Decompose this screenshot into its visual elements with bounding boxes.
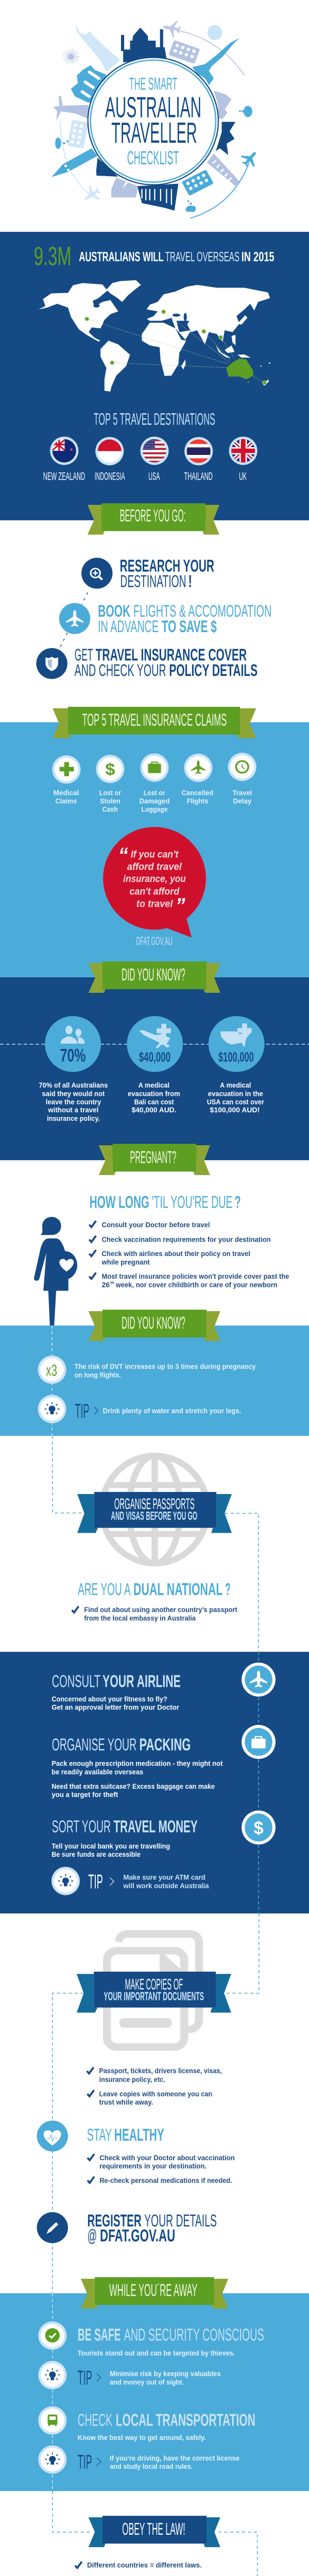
panel: top 5 travel insurance claims: DFAT.GOV.AU — [136, 935, 173, 947]
text: sort your travel money: Tell your local bank you are travelling — [52, 1842, 170, 1850]
checklist: healthy: Check with your Doctor about vaccination — [99, 2154, 235, 2162]
claim: lost cash — [96, 755, 124, 814]
checklist: healthy: requirements in your destination. — [99, 2162, 207, 2170]
text: USA detail: evacuation in the — [208, 1090, 263, 1097]
ribbon: organise passports: ORGANISE PASSPORTS — [114, 1496, 195, 1513]
checklist: pregnancy: Consult your Doctor before travel — [101, 1221, 210, 1229]
claim: cancelled flights: Flights — [187, 797, 209, 805]
text: check local transportation: CHECK — [78, 2411, 112, 2430]
text: register your details: DFAT.GOV.AU — [100, 2226, 175, 2245]
icon: tip bulb — [38, 1395, 66, 1423]
text: register your details: @ — [88, 2226, 97, 2245]
checklist: pregnancy: week, nor cover childbirth or care of your newborn — [115, 1281, 278, 1289]
text: USA detail: A medical — [220, 1081, 251, 1089]
claim: cancelled flights — [181, 754, 213, 805]
text: organise your packing: be readily available overseas — [52, 1768, 143, 1776]
text: research your destination: ! — [188, 572, 192, 591]
claim: travel delay — [228, 753, 256, 805]
ribbon: top 5 claims — [53, 707, 256, 738]
checklist: pregnancy: Check vaccination requirements for your destination — [101, 1235, 271, 1243]
text: stay healthy: HEALTHY — [114, 2126, 164, 2145]
ribbon: while you're away: WHILE YOU´RE AWAY — [109, 2281, 197, 2300]
claim: lost cash: Stolen — [100, 797, 121, 805]
text: consult your airline — [52, 1672, 181, 1711]
ribbon: did you know — [89, 961, 220, 993]
ribbon: did you know: DID YOU KNOW? — [122, 965, 185, 985]
title — [105, 75, 201, 168]
ribbon: pregnant — [99, 1144, 210, 1175]
icon: bus — [38, 2406, 66, 2435]
ribbon: pregnant: PREGNANT? — [130, 1148, 176, 1167]
headline: 9.3M Australians — [34, 242, 274, 271]
text: sort your travel money — [52, 1817, 198, 1858]
heading: how long til you're due: 'TIL YOU'RE DUE — [152, 1193, 233, 1212]
callout: red quote bubble: to travel — [136, 899, 173, 909]
text: research your destination: RESEARCH YOUR — [120, 556, 214, 575]
flag: New Zealand: ★ — [69, 447, 74, 452]
checklist: copies: trust while away. — [99, 2098, 153, 2106]
checklist: healthy — [88, 2154, 235, 2184]
text: sort your travel money: TRAVEL MONEY — [113, 1817, 198, 1836]
heading: are you a dual national: ? — [225, 1580, 231, 1599]
tip: ATM card: TIP — [88, 1871, 103, 1893]
claim: medical — [52, 755, 81, 805]
icon: documents watermark — [107, 1934, 199, 2047]
callout: red quote bubble: insurance, you — [123, 874, 186, 885]
stat: $100,000: $100,000 — [218, 1049, 254, 1064]
text: organise your packing: you a target for theft — [52, 1790, 118, 1799]
callout: red quote bubble: “ — [118, 843, 128, 867]
icon: times three — [38, 1355, 66, 1384]
claim: lost luggage: Damaged — [140, 797, 169, 805]
text: organise your packing: Pack enough prescription medication - they might not — [52, 1759, 223, 1768]
text: USA detail: USA can cost over — [207, 1098, 264, 1106]
text: consult your airline: Concerned about your fitness to fly? — [52, 1695, 167, 1703]
text: sort your travel money: Be sure funds are accessible — [52, 1850, 141, 1858]
text: book flights: TO SAVE $ — [162, 617, 217, 636]
claim: medical: Claims — [56, 797, 77, 805]
title: CHECKLIST — [127, 147, 179, 168]
checklist: pregnancy: Most travel insurance policies won't provide cover past the — [101, 1273, 289, 1280]
text: organise your packing — [52, 1735, 223, 1799]
claim: lost luggage: Lost or — [144, 789, 165, 796]
callout: red quote bubble: ” — [176, 894, 185, 917]
text: book flights — [98, 602, 271, 636]
destination labels: USA — [148, 470, 160, 482]
illustration: world landmarks around the globe — [52, 19, 262, 218]
icon: plane — [59, 603, 90, 634]
claim: cancelled flights: Cancelled — [181, 789, 213, 796]
heading: how long til you're due — [90, 1193, 241, 1212]
claim: lost cash: Cash — [102, 805, 118, 814]
title: AUSTRALIAN — [105, 91, 201, 124]
text: consult your airline: YOUR AIRLINE — [102, 1672, 181, 1691]
ribbon: while you're away — [81, 2277, 228, 2309]
text: travel insurance cover: AND CHECK YOUR — [75, 661, 166, 680]
flag: Thailand — [184, 437, 213, 465]
icon: pregnant woman — [34, 1217, 77, 1326]
claim: lost luggage — [140, 753, 169, 814]
checklist: dual national: from the local embassy in Australia — [84, 1614, 196, 1622]
text: 70% detail: 70% of all Australians — [39, 1081, 108, 1089]
tip: minimise risk — [38, 2361, 221, 2389]
checklist: pregnancy — [89, 1221, 289, 1289]
text: consult your airline: Get an approval letter from your Doctor — [52, 1703, 179, 1711]
stat: 70% — [45, 1016, 101, 1072]
claim: lost cash: $ — [105, 760, 115, 778]
text: sort your travel money: SORT YOUR — [52, 1817, 111, 1836]
tip: minimise risk: and money out of sight. — [110, 2378, 184, 2386]
headline: 9.3M Australians: IN 2015 — [242, 249, 274, 264]
heading: how long til you're due: ? — [234, 1193, 241, 1212]
icon: shield — [36, 648, 67, 679]
text: 70% detail: without a travel — [47, 1106, 98, 1114]
claim: lost luggage: Luggage — [141, 805, 168, 814]
text: DVT risk: on long flights. — [75, 1371, 121, 1379]
headline: 9.3M Australians: 9.3M — [34, 242, 72, 271]
text: stay healthy: STAY — [87, 2126, 112, 2145]
icon: globe watermark — [102, 1455, 208, 1564]
panel: pregnant — [0, 1144, 309, 1326]
icon: magnifier — [81, 558, 112, 589]
text: consult your airline: CONSULT — [52, 1672, 100, 1691]
heading: how long til you're due: HOW LONG — [90, 1193, 149, 1212]
text: USA detail: $100,000 AUD! — [210, 1106, 260, 1114]
panel: while you're away — [0, 2277, 309, 2492]
text: be safe — [78, 2326, 264, 2357]
text: Bali detail — [128, 1081, 180, 1114]
panel: passports and dual nationals — [0, 1436, 309, 1652]
badge: title circle — [88, 57, 218, 185]
tip: drink water: TIP — [75, 1400, 89, 1422]
text: research your destination: DESTINATION — [120, 572, 186, 591]
heading: are you a dual national: ARE YOU A — [78, 1580, 131, 1599]
flag: United Kingdom — [229, 436, 258, 465]
text: organise your packing: Need that extra suitcase? Excess baggage can make — [52, 1782, 215, 1790]
text: travel insurance cover: GET — [75, 646, 93, 664]
flag: USA — [140, 436, 169, 465]
headline: 9.3M Australians: AUSTRALIANS WILL — [79, 249, 164, 264]
checklist: dual national: Find out about using another country's passport — [84, 1605, 237, 1614]
text: travel insurance cover — [75, 646, 258, 680]
world map with routes — [39, 280, 270, 392]
checklist: pregnancy: 26 — [101, 1281, 110, 1289]
text: register your details: REGISTER — [88, 2211, 142, 2230]
ribbon: organise passports: AND VISAS BEFORE YOU GO — [111, 1510, 197, 1522]
destination labels: THAILAND — [184, 470, 213, 482]
flag: Indonesia — [95, 437, 124, 465]
claim: medical: Medical — [54, 789, 79, 796]
tip: ATM card: Make sure your ATM card — [124, 1873, 205, 1882]
destination labels: NEW ZEALAND — [43, 470, 85, 482]
tip: driving: and study local road rules. — [110, 2463, 193, 2470]
tip: minimise risk: Minimise risk by keeping valuables — [110, 2369, 221, 2378]
panel: header logo — [0, 0, 309, 232]
text: DVT risk — [75, 1362, 256, 1379]
heading: are you a dual national: DUAL NATIONAL — [133, 1580, 222, 1599]
destination labels: INDONESIA — [95, 470, 125, 482]
callout: red quote bubble: afford travel — [127, 861, 182, 872]
tip: driving — [38, 2445, 239, 2473]
headline: 9.3M Australians: TRAVEL OVERSEAS — [165, 249, 239, 264]
stat: 70%: 70% — [60, 1045, 85, 1065]
checklist: pregnancy: while pregnant — [101, 1258, 150, 1266]
panel: before you go — [0, 503, 309, 723]
text: be safe: Tourists stand out and can be targeted by thieves. — [78, 2349, 235, 2357]
checklist: pregnancy: th — [110, 1280, 114, 1285]
text: book flights: IN ADVANCE — [98, 617, 159, 636]
tip: minimise risk: TIP — [78, 2367, 92, 2389]
ribbon: before you go — [88, 503, 219, 535]
text: Bali detail: Bali can cost — [134, 1098, 174, 1106]
claim: lost cash: Lost or — [99, 789, 121, 796]
panel: top 5 travel insurance claims — [0, 707, 309, 978]
text: 70% detail: said they would not — [42, 1090, 105, 1097]
tip: drink water: Drink plenty of water and stretch your legs. — [103, 1406, 241, 1415]
heading: are you a dual national — [78, 1580, 231, 1599]
callout: red quote bubble — [103, 827, 206, 938]
text: organise your packing: PACKING — [140, 1735, 191, 1754]
text: travel insurance cover: POLICY DETAILS — [169, 661, 258, 680]
tip: driving: TIP — [78, 2451, 92, 2473]
text: be safe: BE SAFE — [78, 2326, 121, 2345]
text: Bali detail: A medical — [139, 1081, 169, 1089]
text: check local transportation — [78, 2411, 255, 2442]
checklist: pregnancy: Check with airlines about their policy on travel — [101, 1250, 250, 1258]
panel: airline packing money — [0, 1652, 309, 1914]
text: 70% detail: insurance policy. — [47, 1114, 100, 1122]
panel: did you know DVT — [0, 1310, 309, 1436]
stat: $40,000 — [127, 1016, 183, 1072]
checklist: copies: Passport, tickets, drivers license, visas, — [99, 2066, 222, 2075]
text: 70% detail — [39, 1081, 108, 1122]
text: organise your packing: ORGANISE YOUR — [52, 1735, 136, 1754]
icon: pen — [37, 2212, 68, 2243]
tip: driving: If you're driving, have the correct license — [110, 2454, 239, 2462]
title: THE SMART — [129, 75, 177, 94]
panel: travel statistics and top destinations — [0, 232, 309, 521]
text: research your destination — [120, 556, 214, 591]
ribbon: did you know — [89, 1310, 220, 1341]
checklist: copies: insurance policy, etc. — [99, 2075, 165, 2083]
icon: heart — [37, 2121, 68, 2151]
text: book flights: BOOK — [98, 602, 130, 620]
checklist: copies — [87, 2066, 222, 2106]
text: register your details — [88, 2211, 217, 2245]
ribbon: make copies: MAKE COPIES OF — [125, 1976, 183, 1993]
text: DVT risk: The risk of DVT increases up to 3 times during pregnancy — [75, 1362, 256, 1370]
stat: $40,000: $40,000 — [139, 1049, 170, 1064]
checklist: laws — [75, 2561, 234, 2576]
title: TRAVELLER — [111, 116, 197, 149]
tip: drink water — [75, 1400, 241, 1422]
checklist: copies: Leave copies with someone you can — [99, 2090, 212, 2098]
text: stay healthy — [87, 2126, 164, 2145]
ribbon: obey the law: OBEY THE LAW! — [122, 2520, 185, 2539]
ribbon: before you go: BEFORE YOU GO: — [120, 506, 186, 526]
tip: ATM card — [52, 1867, 209, 1895]
icon: dollar — [242, 1810, 276, 1844]
checklist: laws: Different countries = different laws. — [87, 2561, 202, 2569]
icon: airline plane — [242, 1663, 276, 1697]
ribbon: make copies: YOUR IMPORTANT DOCUMENTS — [104, 1990, 204, 2003]
icon: times three: x3 — [46, 1361, 57, 1379]
panel: obey the law — [0, 2491, 309, 2576]
checklist: healthy: Re-check personal medications if needed. — [99, 2176, 232, 2184]
destination labels — [43, 470, 247, 482]
ribbon: obey the law — [89, 2516, 220, 2547]
flag: New Zealand — [50, 436, 78, 465]
panel: documents health and registration — [0, 1913, 309, 2294]
checklist: dual national — [72, 1605, 237, 1622]
text: Bali detail: evacuation from — [128, 1090, 180, 1097]
icon: safe check — [38, 2321, 66, 2350]
ribbon: did you know: DID YOU KNOW? — [122, 1314, 185, 1333]
claim: travel delay: Travel — [233, 789, 252, 796]
icon: dollar: $ — [253, 1818, 264, 1838]
text: 70% detail: leave the country — [46, 1098, 101, 1106]
callout: red quote bubble: If you can't — [131, 849, 179, 860]
claim: travel delay: Delay — [233, 797, 252, 805]
stat: $100,000 — [209, 1016, 265, 1072]
callout: red quote bubble: can't afford — [129, 886, 180, 897]
text: Bali detail: $40,000 AUD. — [132, 1106, 176, 1114]
panel: did you know insurance costs — [0, 961, 309, 1161]
text: register your details: YOUR DETAILS — [144, 2211, 217, 2230]
panel: travel statistics and top destinations: UK — [239, 470, 247, 482]
tip: ATM card: will work outside Australia — [123, 1882, 209, 1890]
text: USA detail — [207, 1081, 264, 1114]
text: check local transportation: Know the best way to get around, safely. — [78, 2433, 206, 2442]
icon: suitcase — [242, 1725, 276, 1759]
ribbon: organise passports — [77, 1492, 232, 1533]
ribbon: make copies — [77, 1972, 231, 2013]
